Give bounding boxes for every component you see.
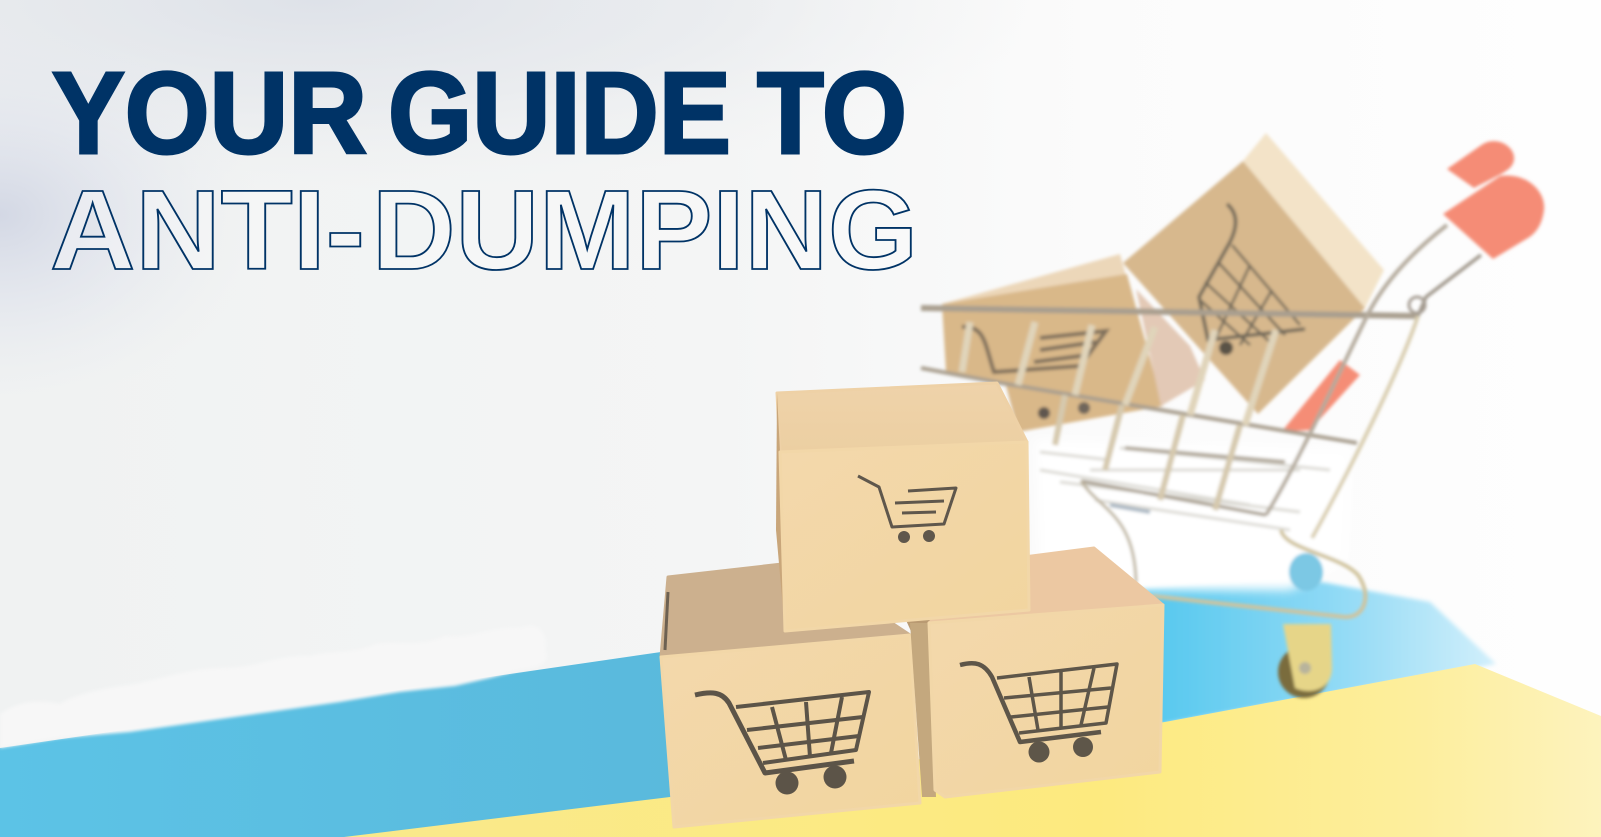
icon: cart on right parcel [960, 663, 1117, 762]
orange inner handle [1283, 360, 1360, 431]
torn paper edge [0, 626, 547, 748]
front wheel [1278, 553, 1332, 698]
title line 1: YOUR [52, 48, 367, 178]
parcel lying in cart [942, 254, 1205, 432]
parcel: bottom right [905, 548, 1163, 797]
blue table band [0, 578, 1496, 837]
parcel: top [776, 383, 1029, 631]
cart white basket base [1035, 440, 1350, 590]
title line 2: ANTI- [50, 167, 365, 293]
title line 1: TO [757, 48, 907, 178]
wire basket frame [921, 225, 1481, 617]
yellow table surface [344, 664, 1601, 837]
icon: cart on top parcel [858, 476, 956, 543]
shopping cart in background [921, 133, 1544, 698]
title line 1: GUIDE [388, 48, 731, 178]
title line 2: DUMPING [372, 167, 918, 293]
tilted parcel in cart [1123, 133, 1384, 414]
title line 1 [52, 48, 907, 178]
parcel stack [661, 383, 1163, 827]
title line 2 [50, 167, 918, 293]
parcel: bottom left [661, 562, 920, 827]
red cart handles [1443, 141, 1544, 259]
title [50, 48, 918, 293]
icon: cart on left parcel [695, 692, 869, 794]
